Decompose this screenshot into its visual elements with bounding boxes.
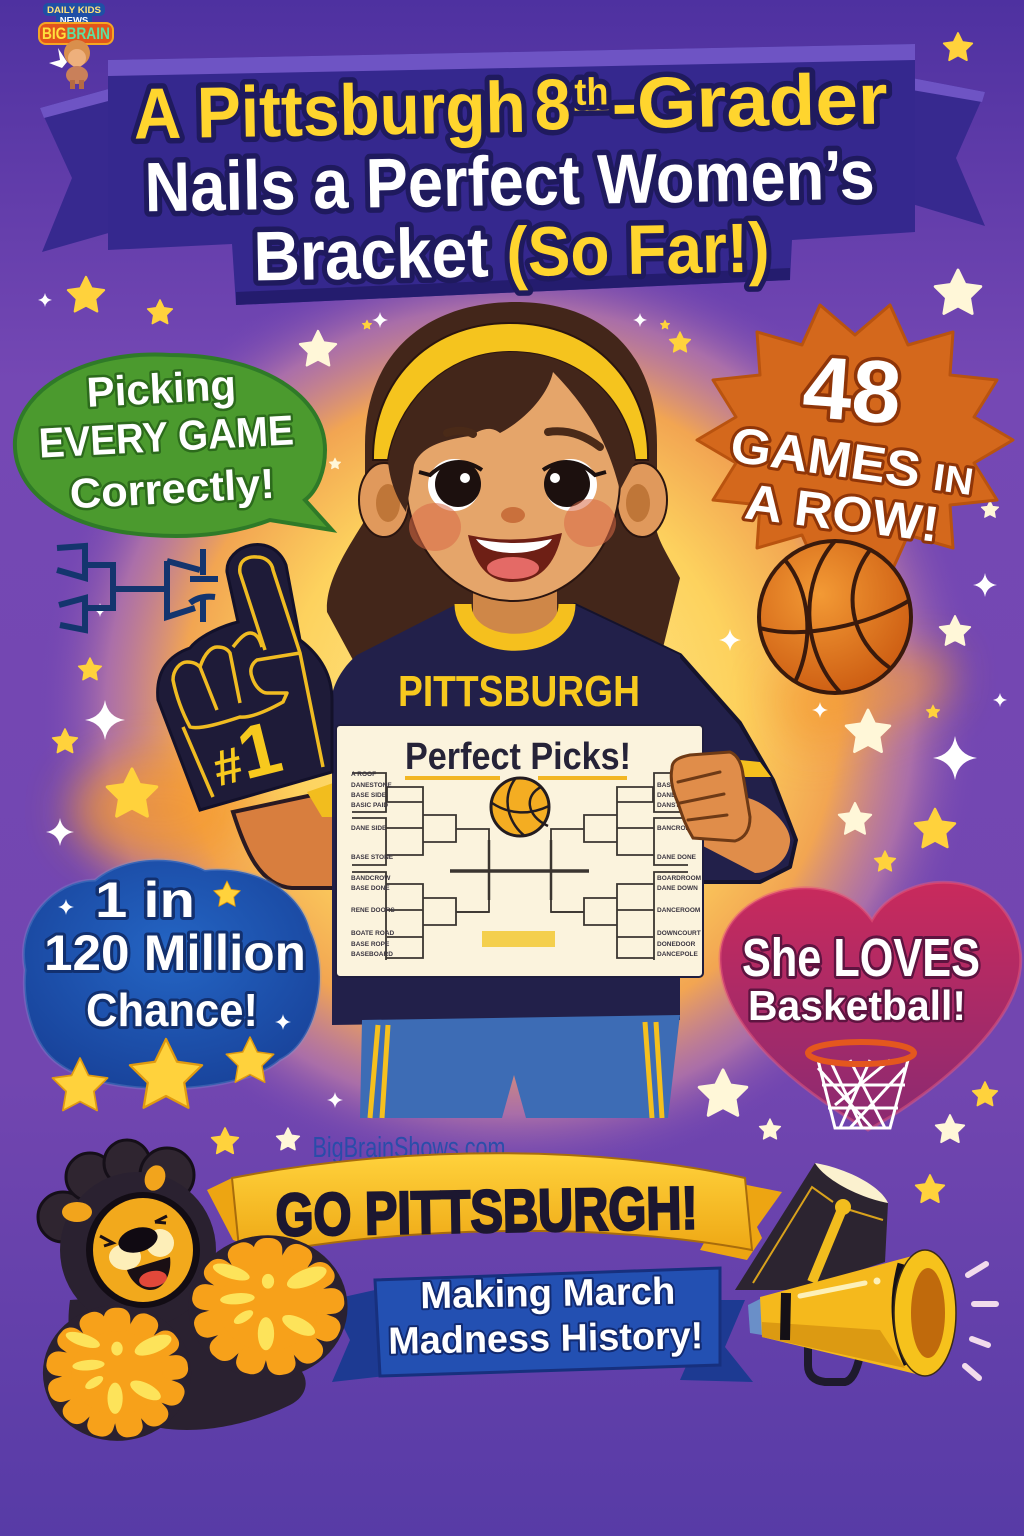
shorts	[360, 1015, 680, 1118]
nose	[501, 507, 525, 523]
team names: DANE DOWN	[657, 885, 698, 892]
team names: BASE SIDE	[351, 792, 387, 799]
team names: BOARDROOM	[657, 875, 701, 882]
stars rating	[52, 881, 274, 1110]
icon: foam finger	[158, 545, 332, 810]
sheet basketball	[491, 778, 549, 836]
title line 1: 8	[534, 65, 571, 146]
banner body	[108, 44, 915, 305]
head	[406, 359, 620, 601]
cheeks	[409, 503, 461, 551]
team names: BASE DONE	[351, 885, 390, 892]
face	[359, 323, 667, 601]
callout: picking every game: Picking	[85, 361, 237, 416]
team names	[351, 771, 701, 958]
team names: DANE DONE	[657, 854, 697, 861]
title line 1: A Pittsburgh	[133, 68, 526, 155]
team names: BASIC PAID	[351, 802, 388, 809]
title line 1	[133, 59, 888, 155]
banner: go pittsburgh	[207, 1153, 782, 1260]
team names: DANCEPOLE	[657, 951, 698, 958]
mouth	[468, 533, 562, 582]
sheet heading: Perfect Picks!	[405, 736, 631, 778]
callout: 1 in 120 million chance	[23, 860, 320, 1110]
bear face	[109, 1244, 141, 1270]
icon: hoop	[808, 1042, 914, 1128]
callout: 48 games in a row starburst	[697, 305, 1013, 575]
banner: making march madness history: Madness History!	[388, 1315, 704, 1363]
team names: DANESTONE	[351, 782, 392, 789]
hair back	[327, 302, 680, 660]
callout: 48 games in a row starburst: GAMES IN	[727, 416, 978, 506]
team names: BANDCROW	[351, 875, 391, 882]
icon: megaphone	[748, 1250, 996, 1382]
shirt	[332, 605, 680, 1025]
team names: BANCROFT	[657, 825, 693, 832]
title banner	[40, 44, 985, 305]
character: bear mascot	[38, 1140, 306, 1430]
team names: DANE PAD	[657, 792, 691, 799]
team names: BASE ROPE	[351, 941, 390, 948]
logo: Daily Kids News Big Brain	[39, 3, 113, 89]
team names: DANCEROOM	[657, 907, 700, 914]
bracket sheet	[336, 725, 703, 977]
logo: Daily Kids News Big Brain: DAILY KIDS	[47, 5, 101, 16]
bear head	[38, 1140, 194, 1242]
title line 1: -Grader	[611, 59, 888, 144]
title line 3: Bracket (So Far!)	[253, 209, 770, 296]
logo: Daily Kids News Big Brain: BIGBRAIN	[42, 24, 110, 43]
callout: 1 in 120 million chance: 1 in	[95, 872, 195, 928]
sound lines	[965, 1264, 996, 1378]
shirt collar	[463, 604, 567, 642]
callout: she loves basketball heart	[720, 882, 1021, 1130]
callout: picking every game: Correctly!	[69, 460, 276, 517]
sleeve stripe	[740, 760, 771, 777]
website credit: BigBrainShows.com	[312, 1132, 506, 1164]
arm skin right	[703, 797, 790, 873]
character: girl with bracket	[233, 302, 796, 1118]
title line 1: th	[574, 71, 609, 114]
bangs	[388, 352, 635, 512]
arm: left	[233, 782, 336, 888]
team names: BASE PLE	[657, 782, 690, 789]
icon: bracket diagram	[57, 546, 218, 630]
callout: 48 games in a row starburst: A ROW!	[742, 473, 942, 553]
logo: Daily Kids News Big Brain: NEWS	[60, 16, 88, 26]
icon: black drum	[735, 1163, 888, 1290]
eyes	[419, 459, 606, 511]
callout: 1 in 120 million chance: Chance!	[86, 984, 258, 1036]
banner: go pittsburgh: GO PITTSBURGH!	[275, 1174, 698, 1249]
icon: pom-pom left	[43, 1305, 191, 1441]
banner: making march madness history	[330, 1268, 753, 1382]
team names: RENE DOORS	[351, 907, 395, 914]
title line 2: Nails a Perfect Women’s	[144, 136, 875, 226]
callout: picking every game: EVERY GAME	[38, 406, 295, 467]
team names: A ROOF	[351, 771, 376, 778]
icon: pom-pom right	[188, 1235, 348, 1379]
ears	[359, 463, 409, 537]
callout: picking every game	[15, 355, 332, 536]
icon: basketball	[759, 541, 911, 693]
scattered stars	[38, 33, 1007, 1202]
callout: 48 games in a row starburst: 48	[800, 337, 904, 442]
callout: 1 in 120 million chance: 120 Million	[44, 925, 306, 981]
neck	[473, 590, 557, 639]
right bracket lines	[551, 773, 688, 960]
bear body	[68, 1290, 306, 1430]
team names: DANSTONE	[657, 802, 694, 809]
left bracket lines	[352, 773, 589, 960]
team names: DOWNCOURT	[657, 930, 701, 937]
team names: DANE SIDE	[351, 825, 387, 832]
headband	[373, 323, 648, 460]
banner tails	[40, 78, 985, 252]
sleeve right	[575, 605, 796, 882]
eyebrows	[447, 431, 600, 447]
team names: BASEBOARD	[351, 951, 393, 958]
team names: BASE STONE	[351, 854, 394, 861]
team names: DONEDOOR	[657, 941, 696, 948]
foam finger label: #1	[202, 705, 289, 802]
banner: making march madness history: Making March	[420, 1271, 676, 1317]
fist	[671, 752, 750, 841]
shirt text: PITTSBURGH	[398, 667, 640, 716]
gold plate	[482, 931, 555, 947]
team names: BOATE ROAD	[351, 930, 395, 937]
callout: she loves basketball heart: Basketball!	[748, 982, 966, 1029]
